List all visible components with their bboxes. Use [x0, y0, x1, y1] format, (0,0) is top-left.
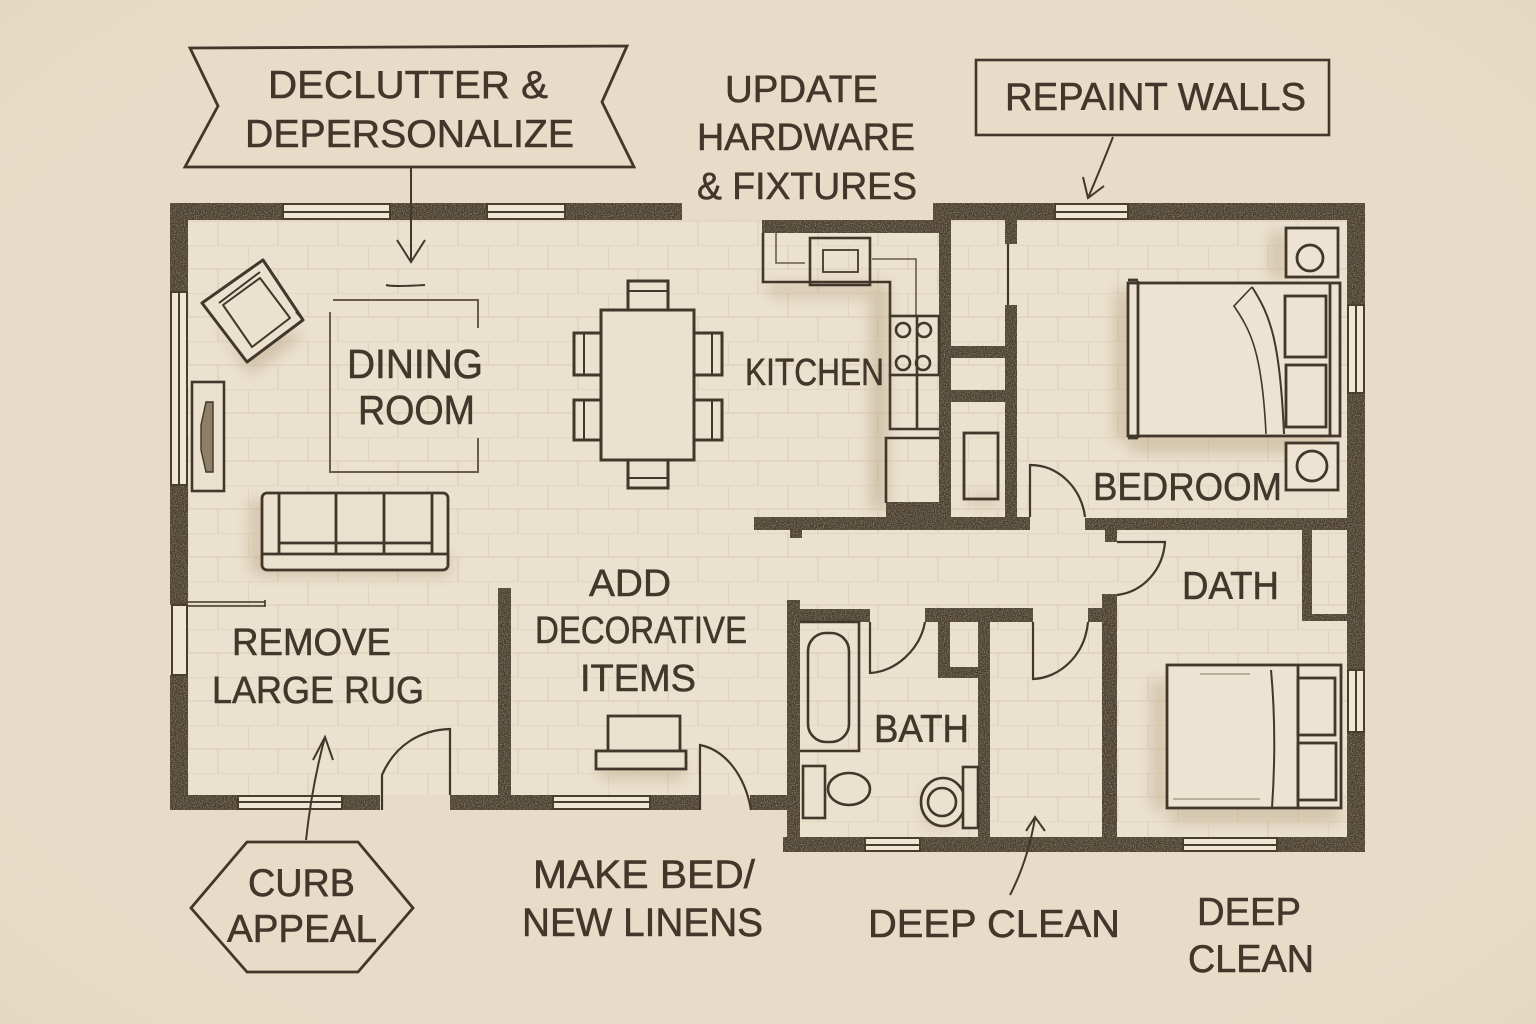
banner: declutter & depersonalize — [185, 46, 634, 167]
label: remove large rug: LARGE RUG — [212, 670, 424, 712]
bathtub — [800, 622, 859, 751]
outer wall: bottom left — [170, 795, 380, 810]
callout: repaint walls — [976, 60, 1329, 135]
arrow: declutter to dining room — [386, 168, 425, 286]
wall: kitchen right — [939, 203, 951, 523]
wall: bedroom bottom — [1085, 518, 1347, 530]
armchair — [202, 260, 303, 362]
label: add decorative items — [535, 563, 747, 700]
wall: closet divider one — [951, 346, 1005, 358]
outer wall: top left — [170, 203, 682, 220]
banner: declutter & depersonalize: DEPERSONALIZE — [245, 113, 574, 156]
label: update hardware and fixtures: & FIXTURES — [697, 166, 917, 208]
rug: dining room — [330, 300, 478, 472]
windows — [171, 204, 1364, 851]
wall: closet right — [1005, 305, 1017, 520]
outer wall: left middle — [170, 485, 188, 605]
toilet and sink — [803, 766, 978, 828]
wall: kitchen top — [762, 220, 945, 233]
callout: curb appeal: APPEAL — [227, 908, 377, 951]
label: add decorative items: DECORATIVE — [535, 610, 747, 652]
door: bath — [870, 622, 925, 673]
label: bedroom: BEDROOM — [1093, 466, 1282, 509]
window: bottom middle — [553, 796, 650, 809]
window: bedroom right lower — [1348, 670, 1364, 732]
closet unit — [964, 433, 998, 499]
window: bedroom bottom — [1183, 838, 1277, 851]
label: make bed / new linens — [522, 853, 763, 945]
outer wall: right — [1347, 203, 1365, 852]
window: bottom left — [238, 796, 342, 809]
nightstands — [1286, 228, 1338, 490]
wall: bath right — [978, 622, 990, 837]
outer wall: left lower — [170, 675, 188, 810]
arrow: repaint walls — [1083, 137, 1113, 198]
outer wall: bottom middle — [450, 795, 700, 810]
label: update hardware and fixtures — [697, 69, 917, 208]
wall: closet divider two — [951, 390, 1005, 402]
label: bath: BATH — [874, 708, 969, 751]
window: bedroom right upper — [1348, 305, 1364, 393]
label: remove large rug — [212, 622, 424, 712]
label: dining room: ROOM — [358, 387, 475, 433]
wall: right hall stub — [1088, 608, 1117, 622]
floor plan walls — [170, 203, 1365, 852]
outer wall: top right — [933, 203, 1365, 220]
label: dining room: DINING — [347, 341, 483, 387]
kitchen counters and appliances — [763, 233, 939, 503]
callout: repaint walls: REPAINT WALLS — [1005, 76, 1306, 119]
bed: main bedroom — [1128, 280, 1340, 438]
door: living room — [700, 745, 751, 810]
wall: kitchen bottom — [754, 517, 1030, 530]
label: update hardware and fixtures: HARDWARE — [697, 117, 915, 159]
side table with plant — [192, 382, 224, 491]
window: left — [171, 292, 187, 485]
wall: hall stub — [790, 530, 802, 538]
label: dath: DATH — [1182, 565, 1279, 608]
window: top left — [283, 204, 390, 219]
arrow: deep clean — [1010, 817, 1045, 895]
label: add decorative items: ITEMS — [580, 658, 696, 700]
wall: bath top right — [925, 608, 1033, 622]
label: remove large rug: REMOVE — [232, 622, 391, 664]
label: deep clean second — [1188, 891, 1314, 981]
label: deep clean second: CLEAN — [1188, 938, 1314, 981]
window: bath bottom — [865, 838, 920, 851]
label: update hardware and fixtures: UPDATE — [725, 69, 878, 111]
wall: closet stub — [1005, 220, 1017, 244]
sofa — [262, 493, 448, 570]
wall: kitchen fill — [886, 502, 941, 518]
wall: living room partition — [498, 588, 511, 795]
banner: declutter & depersonalize: DECLUTTER & — [268, 64, 548, 107]
door: closet sliding — [1007, 244, 1009, 305]
wall: bath closet bottom — [938, 667, 988, 678]
outer wall: left upper — [170, 203, 188, 292]
wall: door stub — [1105, 530, 1117, 542]
window: left lower opening — [172, 605, 187, 675]
door: bedroom — [1030, 465, 1085, 517]
dining table and chairs — [574, 281, 722, 488]
window: top right — [1055, 204, 1128, 219]
window: top middle — [487, 204, 565, 219]
wall: bath left — [787, 600, 800, 852]
wall: bath top left — [787, 609, 870, 622]
callout: curb appeal: CURB — [248, 862, 355, 905]
floor — [188, 220, 1347, 837]
door: entry — [382, 729, 450, 810]
wall: bedroom closet side — [1302, 530, 1312, 620]
outer wall: bottom right — [783, 837, 1365, 852]
wall: back bedroom left — [1102, 594, 1117, 837]
label: make bed / new linens: NEW LINENS — [522, 901, 763, 945]
callout: curb appeal — [191, 842, 413, 972]
outer wall: bottom stub — [750, 795, 790, 810]
label: add decorative items: ADD — [589, 563, 671, 605]
label: deep clean second: DEEP — [1197, 891, 1301, 934]
door: hall — [1033, 622, 1088, 679]
door: back bedroom — [1117, 542, 1165, 595]
furniture shadows — [215, 232, 1340, 825]
wall: bedroom closet bottom — [1302, 614, 1347, 621]
label: make bed / new linens: MAKE BED/ — [533, 853, 756, 897]
floor brick lines — [188, 220, 1347, 837]
window sill: sliding door — [188, 600, 265, 607]
label: dining room — [347, 341, 483, 433]
doors and swing arcs — [188, 244, 1165, 810]
wall: bath closet side — [938, 622, 950, 678]
label: deep clean: DEEP CLEAN — [868, 903, 1120, 946]
decorative console — [596, 716, 686, 769]
arrow: curb appeal — [306, 737, 333, 840]
label: kitchen: KITCHEN — [745, 352, 884, 394]
bed: second bedroom — [1167, 665, 1341, 808]
